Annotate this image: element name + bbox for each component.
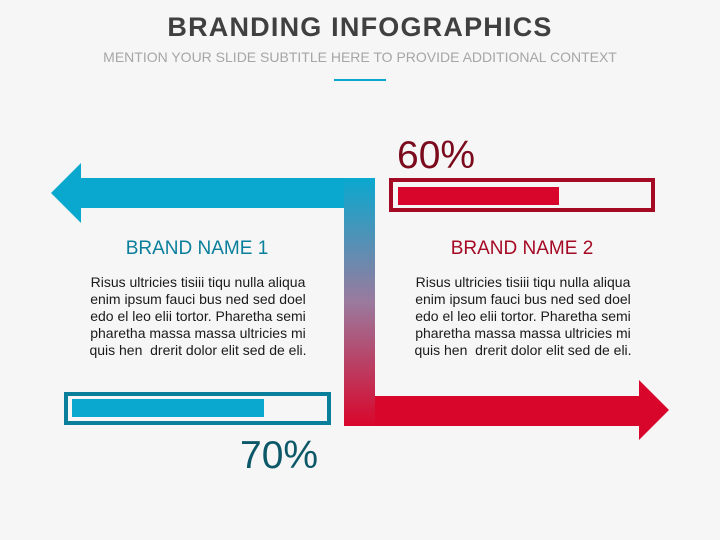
progress bar: brand 2 60% <box>389 178 655 212</box>
vertical connector <box>344 178 375 426</box>
label 70%: 70% <box>240 434 318 477</box>
title: BRANDING INFOGRAPHICS <box>167 12 553 42</box>
accent line <box>334 79 386 81</box>
text: brand 1 <box>89 274 307 358</box>
text: brand 2: enim ipsum fauci bus ned sed doel <box>415 291 631 307</box>
text: brand 1: pharetha massa massa ultricies mi <box>90 325 306 341</box>
text: brand 1: quis hen drerit dolor elit sed de eli. <box>89 342 307 358</box>
arrow: right red <box>375 380 669 440</box>
label 60%: 60% <box>397 134 475 177</box>
text: brand 2: quis hen drerit dolor elit sed de eli. <box>414 342 632 358</box>
heading: brand 2: BRAND NAME 2 <box>451 238 593 259</box>
text: brand 1: Risus ultricies tisiii tiqu nulla aliqua <box>91 274 305 290</box>
text: brand 2: Risus ultricies tisiii tiqu nulla aliqua <box>416 274 630 290</box>
text: brand 2: pharetha massa massa ultricies mi <box>415 325 631 341</box>
text: brand 2 <box>414 274 632 358</box>
arrow: left blue <box>51 163 345 223</box>
subtitle: MENTION YOUR SLIDE SUBTITLE HERE TO PROVIDE ADDITIONAL CONTEXT <box>103 49 617 65</box>
text: brand 2: edo el leo elii tortor. Pharetha semi <box>415 308 631 324</box>
heading: brand 1: BRAND NAME 1 <box>126 238 268 259</box>
text: brand 1: enim ipsum fauci bus ned sed doel <box>90 291 306 307</box>
progress bar: brand 1 70% <box>64 392 331 425</box>
text: brand 1: edo el leo elii tortor. Pharetha semi <box>90 308 306 324</box>
